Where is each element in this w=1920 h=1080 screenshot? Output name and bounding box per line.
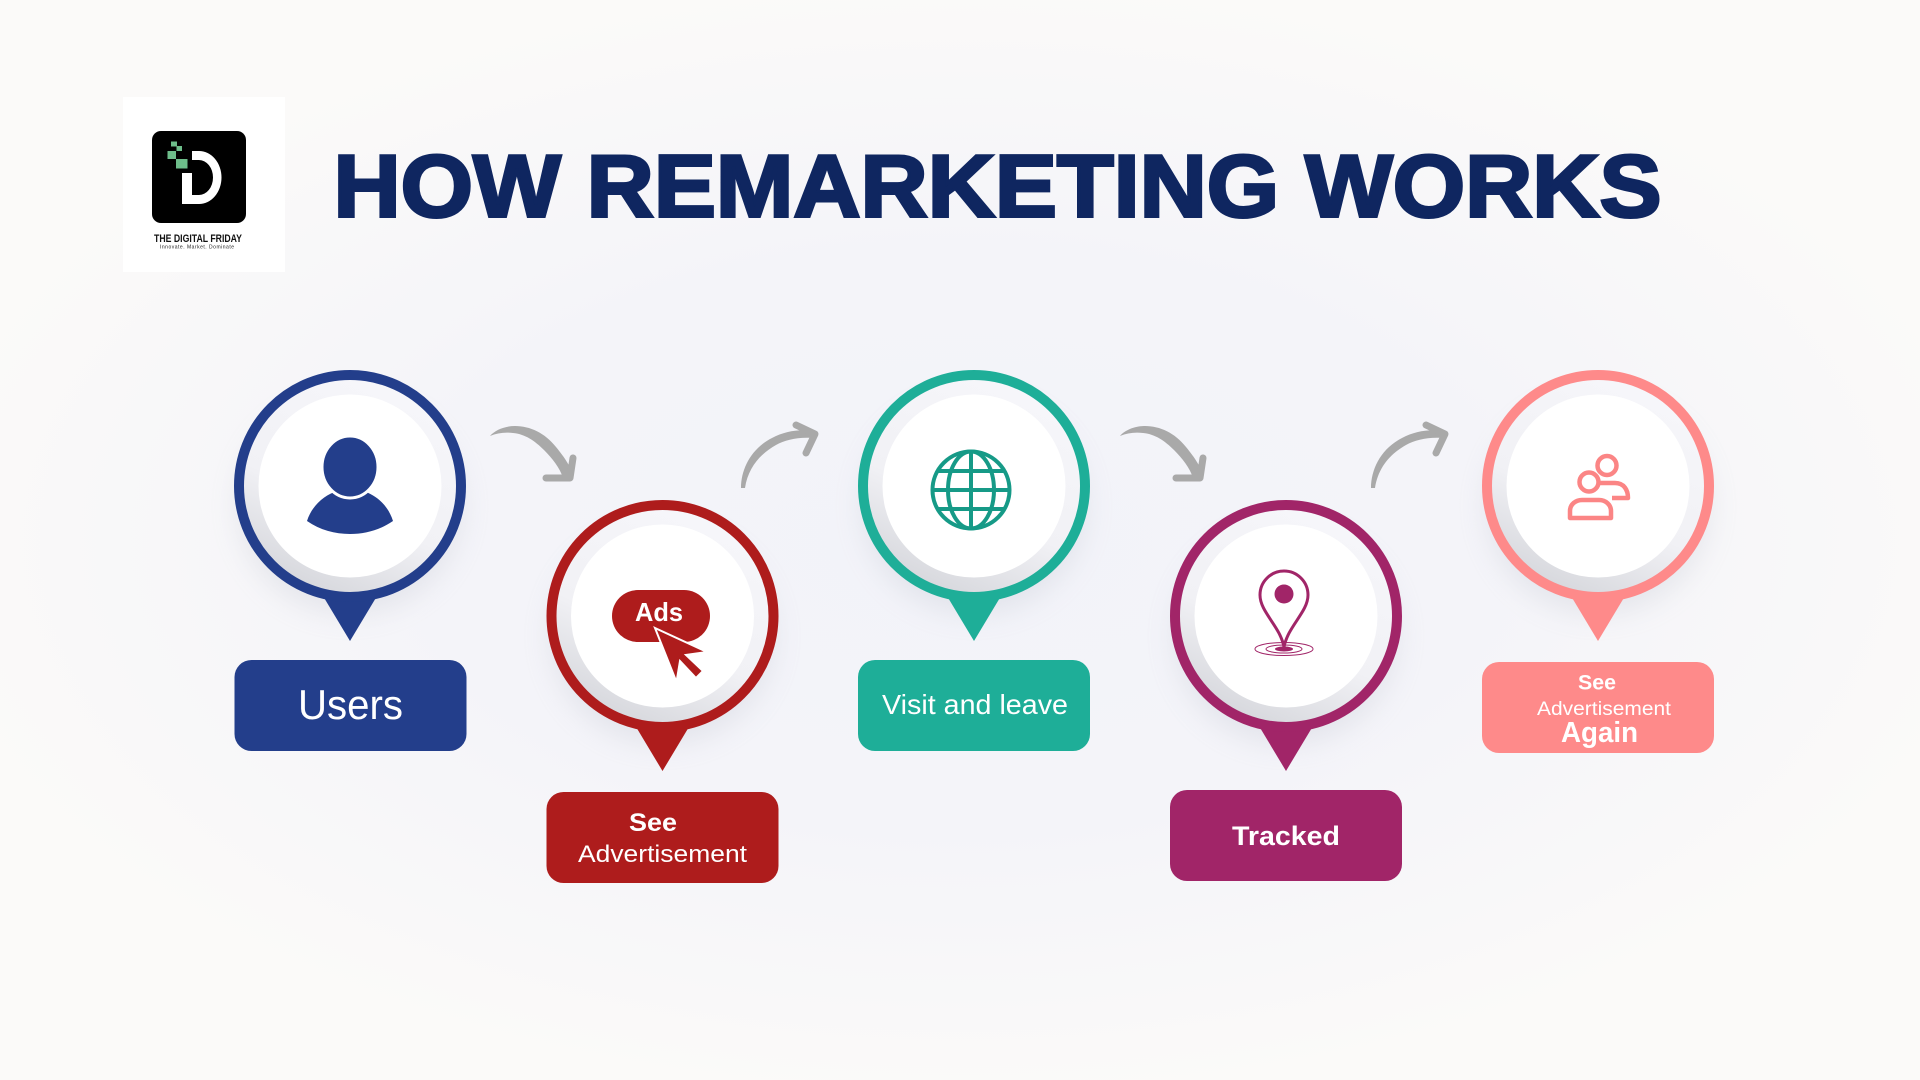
panel: step 2 see advertisement [546, 505, 778, 883]
logo: The Digital Friday: THE DIGITAL FRIDAY [154, 233, 243, 245]
label: visit and leave: Visit and leave [882, 689, 1068, 720]
pin tail [323, 596, 377, 641]
icon: ads cursor: Ads [635, 597, 683, 627]
arrow: visit to tracked [1120, 426, 1203, 478]
label: visit and leave [858, 660, 1090, 751]
arrow: users to advertisement [490, 426, 573, 478]
icon: globe [932, 451, 1010, 529]
arrow: tracked to see again [1371, 425, 1445, 488]
icon: ads cursor [612, 590, 710, 682]
arrow: advertisement to visit [741, 425, 815, 488]
title: HOW REMARKETING WORKS [334, 136, 1662, 236]
label: see advertisement: Advertisement [578, 841, 747, 868]
pin tail [1571, 596, 1625, 641]
panel: step 1 users [234, 375, 466, 751]
label: see advertisement: See [629, 809, 677, 837]
label: see advertisement again [1482, 662, 1714, 753]
label: tracked [1170, 790, 1402, 881]
pin tail [1259, 726, 1313, 771]
label: see advertisement again: Again [1561, 717, 1638, 749]
label: users: Users [298, 681, 403, 728]
label: see advertisement [546, 792, 778, 883]
panel: step 5 see advertisement again [1482, 375, 1714, 753]
icon: location pin [1255, 571, 1313, 656]
label: tracked: Tracked [1232, 821, 1340, 851]
label: see advertisement again: See [1578, 672, 1616, 694]
icon: two people [1570, 456, 1628, 518]
panel: step 3 visit and leave [858, 375, 1090, 751]
panel: step 4 tracked [1170, 505, 1402, 881]
pin tail [947, 596, 1001, 641]
label: users [234, 660, 466, 751]
logo: The Digital Friday: Innovate. Market. Dominate [160, 244, 234, 250]
icon: user [307, 436, 393, 534]
label: see advertisement again: Advertisement [1537, 699, 1672, 720]
logo: The Digital Friday [123, 97, 285, 272]
pin tail [636, 726, 690, 771]
